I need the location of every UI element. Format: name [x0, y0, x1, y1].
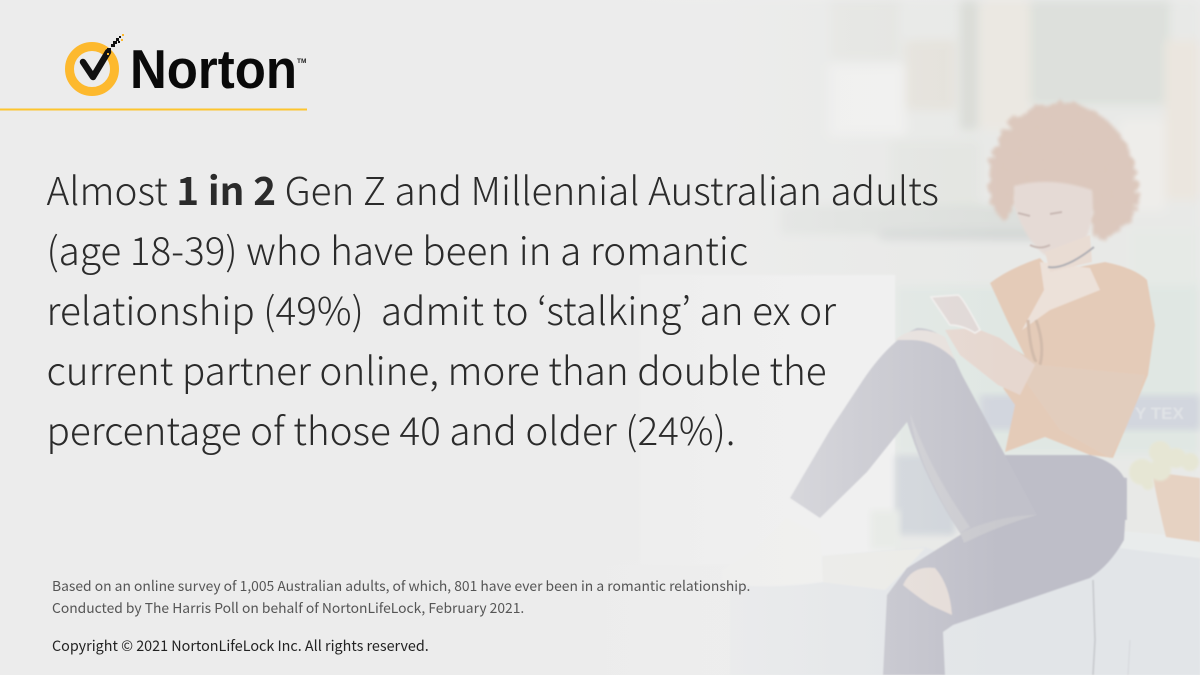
arm [1000, 340, 1145, 458]
city skyline [560, 0, 1200, 560]
face [1014, 182, 1093, 257]
far leg [790, 328, 1127, 533]
skin at knee rip [903, 568, 952, 615]
logo: Norton [70, 34, 306, 100]
phone [931, 295, 980, 333]
choker [1048, 247, 1094, 267]
main statement: Almost 1 in 2 Gen Z and Millennial Australian adults [46, 161, 939, 217]
logo underline [0, 108, 307, 110]
hands [945, 328, 1035, 395]
distant sign [870, 395, 1200, 550]
eyes and mouth [1018, 212, 1062, 248]
icon: checkmark [83, 52, 108, 77]
hair [988, 102, 1137, 238]
main statement: current partner online, more than double the [46, 341, 827, 397]
main statement: relationship (49%) admit to ‘stalking’ an ex or [46, 281, 836, 337]
copyright: Copyright © 2021 NortonLifeLock Inc. All rights reserved. [52, 635, 429, 656]
shirt [990, 258, 1155, 458]
photo: woman on rooftop with phone [560, 0, 1200, 675]
trademark: TM [297, 58, 306, 65]
near leg [883, 455, 1127, 675]
wordmark: Norton [130, 38, 297, 100]
survey footnote: Conducted by The Harris Poll on behalf of NortonLifeLock, February 2021. [52, 597, 524, 617]
icon: pixel trail [107, 34, 124, 55]
survey footnote: Based on an online survey of 1,005 Australian adults, of which, 801 have ever been in a romantic relationship. [52, 575, 750, 595]
ledge [730, 531, 1200, 675]
highlight on inner leg [910, 413, 970, 533]
shoe [722, 518, 823, 586]
main statement: (age 18-39) who have been in a romantic [46, 221, 748, 277]
plant pot [1129, 441, 1200, 542]
sign lettering: Y TEX [1135, 404, 1184, 423]
icon: yellow ring [70, 46, 114, 92]
neck [1045, 235, 1092, 272]
light wall left [640, 275, 895, 565]
main statement: percentage of those 40 and older (24%). [46, 401, 735, 457]
